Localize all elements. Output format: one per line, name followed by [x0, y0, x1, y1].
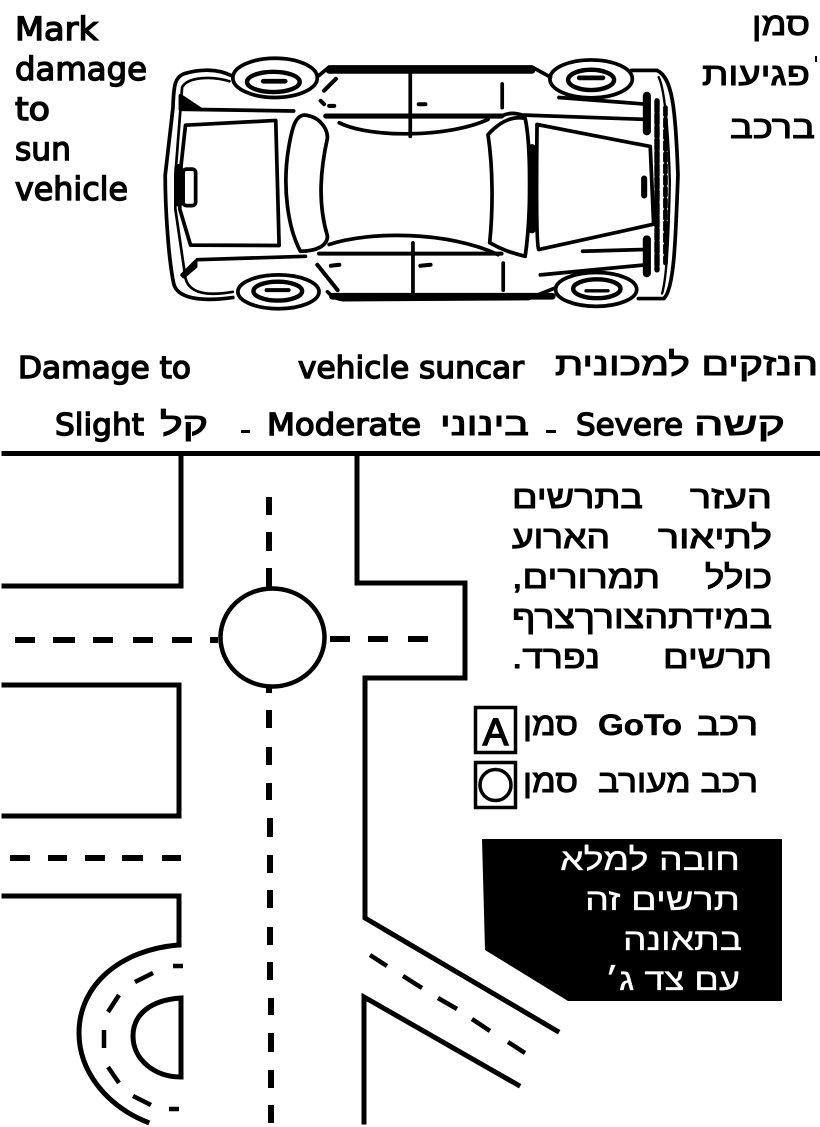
heading: mark damage (English): Mark: [15, 10, 98, 48]
horizontal lane dashes: [15, 639, 428, 640]
heading: mark damage (English): sun: [15, 130, 71, 168]
heading: mark damage (English): [15, 10, 147, 208]
legend: vehicle A: סמן: [523, 706, 578, 742]
inner body outline: [175, 78, 233, 294]
instruction text: תמרורים,: [512, 559, 660, 595]
callout: mandatory notice: חובה למלא: [560, 842, 740, 877]
heading: mark damage (Hebrew): ברכב: [730, 109, 815, 145]
road edges: [4, 455, 181, 586]
instruction text: במידתהצורךצרף: [512, 599, 772, 635]
instruction text: כולל: [705, 559, 772, 595]
road diagram: [4, 454, 820, 1123]
icon: circle box: [476, 762, 516, 808]
heading: mark damage (Hebrew): [702, 6, 817, 145]
severity scale: [55, 406, 785, 443]
heading: mark damage (Hebrew): סמן: [752, 6, 810, 42]
heading: mark damage (English): vehicle: [15, 170, 128, 208]
curved driveway: [79, 945, 178, 1122]
legend: other vehicle: סמן: [523, 763, 578, 799]
upper doors: [329, 60, 532, 80]
diagonal road dashes: [370, 955, 525, 1053]
windshield: [286, 115, 327, 251]
icon: letter A box: A: [483, 712, 509, 754]
divider line: [4, 451, 820, 456]
heading: mark damage (Hebrew): פגיעות: [702, 56, 810, 92]
car body outline: [165, 67, 678, 300]
instruction text: תרשים: [663, 639, 772, 675]
damage heading (English): [18, 351, 525, 386]
legend: vehicle A: רכב: [697, 706, 758, 742]
callout: mandatory notice: בתאונה: [623, 922, 742, 957]
legend: other vehicle: רכב מעורב: [598, 763, 758, 799]
instruction text: העזר: [690, 479, 772, 515]
car top-view diagram: [165, 58, 678, 309]
hood and handle: [180, 120, 279, 246]
rear lights and grille: [635, 96, 659, 273]
callout: mandatory notice: [482, 839, 782, 1001]
lower doors: [333, 286, 552, 306]
instruction text: נפרד.: [512, 639, 600, 675]
severity scale: Slight: [55, 408, 144, 443]
legend: vehicle A: GoTo: [598, 709, 682, 742]
rear window: [488, 118, 530, 256]
heading: mark damage (English): to: [15, 90, 50, 128]
instruction text: בתרשים: [512, 479, 643, 515]
roundabout: [220, 588, 324, 686]
damage heading (English): vehicle suncar: [298, 351, 525, 386]
legend: vehicle A: [476, 706, 758, 754]
vertical lane dashes: [269, 497, 271, 1123]
severity scale: קל: [160, 406, 208, 442]
instruction text: לתיאור: [658, 519, 772, 555]
icon: letter A box: [476, 708, 516, 754]
callout: mandatory notice: תרשים זה: [585, 882, 740, 917]
severity scale: קשה: [694, 406, 785, 442]
damage heading (Hebrew): הנזקים למכונית: [555, 346, 818, 382]
wheels: [233, 58, 317, 97]
trunk: [537, 124, 654, 250]
instruction text: הארוע: [512, 519, 610, 555]
severity scale: Moderate: [267, 408, 421, 443]
legend: other vehicle: [476, 762, 758, 808]
severity scale: Severe: [576, 408, 683, 443]
damage heading (English): Damage to: [18, 351, 191, 386]
severity scale: בינוני: [440, 406, 529, 442]
heading: mark damage (English): damage: [15, 50, 147, 88]
instruction text: [512, 479, 772, 675]
callout: mandatory notice: עם צד ג׳: [605, 962, 740, 997]
